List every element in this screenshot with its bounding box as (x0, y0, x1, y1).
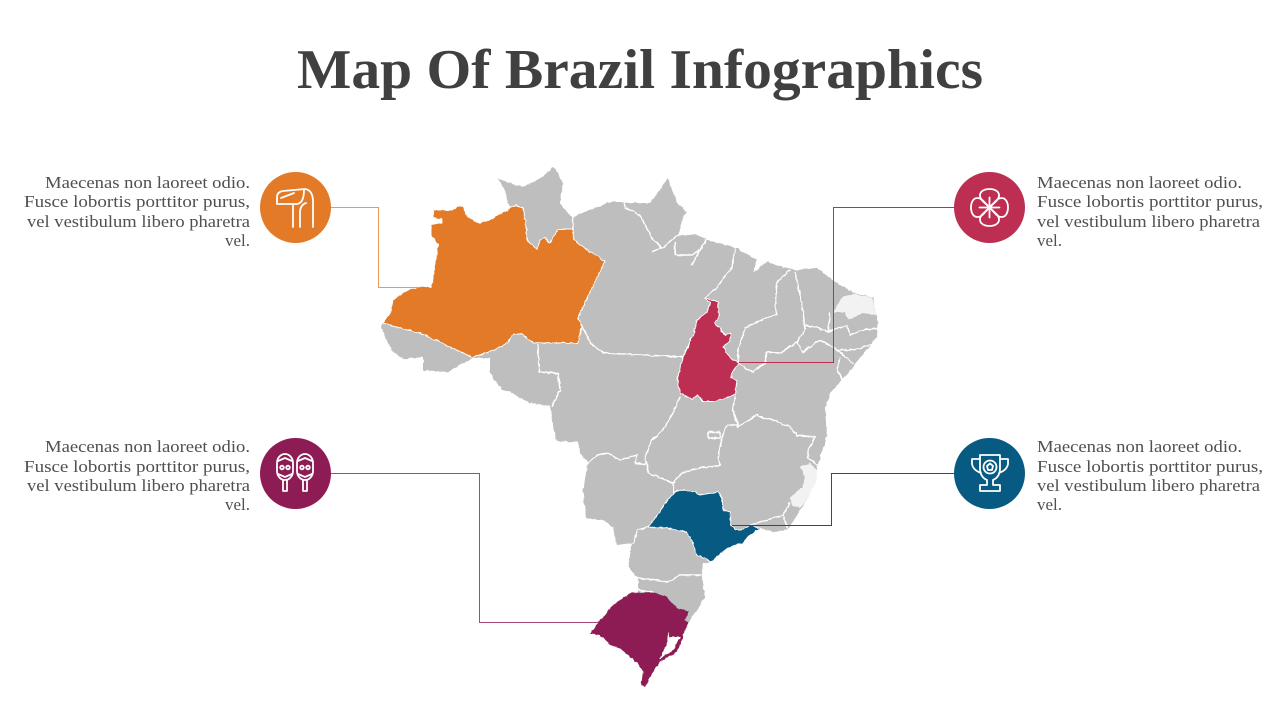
text block: bottom right: vel vestibulum libero pharetra (1037, 476, 1261, 495)
text block: top left: Fusce lobortis porttitor purus, (24, 192, 250, 211)
icon: toucan (260, 172, 331, 243)
state: Rio Grande do Sul (purple) (590, 592, 689, 687)
text block: top right (1037, 173, 1263, 250)
map: grey country base (381, 167, 878, 640)
text block: top right: Fusce lobortis porttitor purus, (1037, 192, 1263, 211)
text block: bottom right (1037, 437, 1263, 514)
state: Rio Grande do Norte (pale) (833, 294, 877, 320)
title: Map Of Brazil Infographics (297, 39, 983, 101)
text block: top right: vel. (1037, 231, 1062, 250)
text block: top right: Maecenas non laoreet odio. (1037, 173, 1242, 192)
icon: flower (954, 172, 1025, 243)
connector: crimson (739, 208, 955, 362)
icon: trophy (954, 438, 1025, 509)
icon: maracas (260, 438, 331, 509)
text block: top left: Maecenas non laoreet odio. (45, 173, 250, 192)
state: Sao Paulo (blue) (648, 490, 760, 562)
text block: bottom left: Fusce lobortis porttitor purus, (24, 457, 250, 476)
connector: purple (331, 474, 598, 622)
lagoon (659, 632, 680, 660)
text block: bottom left: Maecenas non laoreet odio. (45, 437, 250, 456)
text block: bottom right: Fusce lobortis porttitor purus, (1037, 457, 1263, 476)
text block: bottom right: vel. (1037, 495, 1062, 514)
connector: orange (331, 208, 420, 288)
state: Espirito Santo (pale) (790, 463, 817, 508)
text block: bottom left: vel vestibulum libero pharetra (27, 476, 251, 495)
state: Tocantins (crimson) (677, 298, 739, 401)
text block: top left (24, 173, 251, 250)
text block: bottom right: Maecenas non laoreet odio. (1037, 437, 1242, 456)
map of Brazil (381, 167, 878, 687)
text block: bottom left: vel. (225, 495, 250, 514)
state: Amazonas (orange) (383, 205, 605, 357)
text block: top right: vel vestibulum libero pharetra (1037, 212, 1261, 231)
connector: blue (732, 474, 955, 526)
text block: top left: vel. (225, 231, 250, 250)
text block: top left: vel vestibulum libero pharetra (27, 212, 251, 231)
map: internal state borders (538, 202, 878, 592)
text block: bottom left (24, 437, 251, 514)
